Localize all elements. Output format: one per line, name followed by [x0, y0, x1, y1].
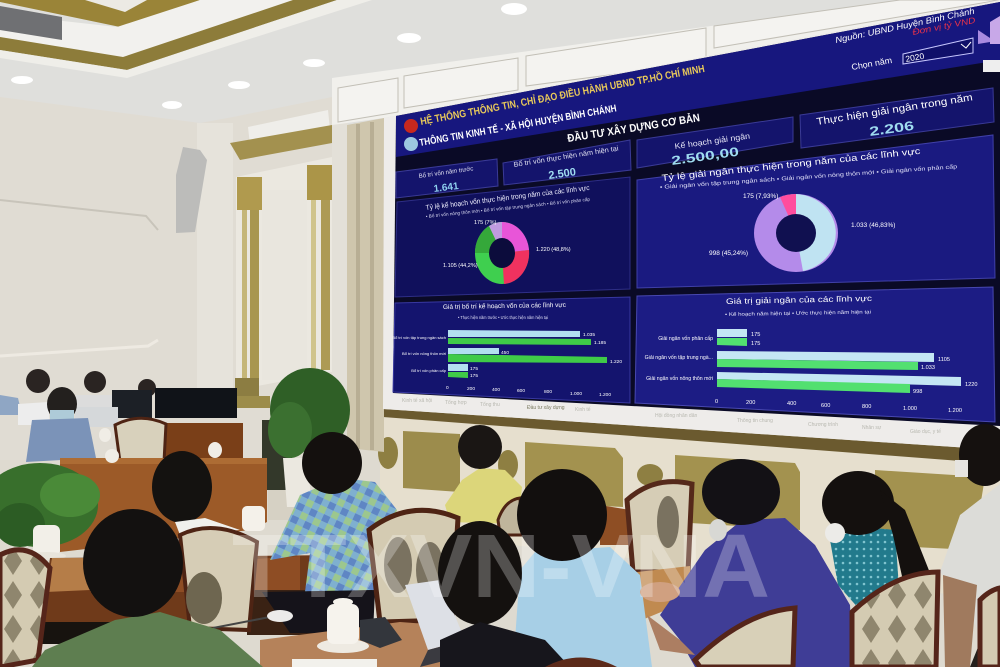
- LED dashboard screen: [383, 0, 1000, 450]
- donut labels: 175 (7,93%): [743, 193, 778, 200]
- donut legend: • Giải ngân vốn tập trung ngân sách • Giải ngân vốn nông thôn mới • Giải ngân vốn phân cấp: [660, 164, 957, 191]
- donut labels: 1.105 (44,2%): [443, 263, 478, 269]
- donut labels: 175 (7%): [474, 220, 496, 226]
- KPI card: disbursed this year: Thực hiện giải ngân trong năm: [816, 92, 974, 128]
- KPI card: disbursement plan: Kế hoạch giải ngân: [674, 131, 751, 151]
- screen dark background: [393, 2, 1000, 426]
- donut chart: allocation shares: [475, 222, 529, 284]
- bar values and axis: 600: [517, 388, 525, 394]
- bar values and axis: 998: [913, 389, 922, 395]
- screen white frame: [383, 0, 1000, 450]
- bar values and axis: 200: [746, 400, 755, 406]
- source note: Nguồn: UBND Huyện Bình Chánh: [834, 6, 976, 45]
- watermark: TTXVN-VNA: [232, 517, 770, 617]
- bar values and axis: 175: [751, 332, 760, 338]
- year dropdown: 2020: [905, 51, 925, 64]
- teacup and saucer: [317, 598, 369, 653]
- small chair behind blue shirt woman: [498, 498, 522, 535]
- KPI card: current-year allocation: Bổ trí vốn thực hiện năm hiện tại: [513, 143, 619, 169]
- bar values and axis: 175: [470, 373, 478, 379]
- man in green shirt, foreground: [32, 509, 263, 667]
- bar values and axis: 1.033: [921, 365, 935, 371]
- bar values and axis: 600: [821, 403, 830, 409]
- bar values and axis: 1105: [938, 357, 950, 363]
- panel: allocation bars: [392, 297, 630, 403]
- donut legend: • Bổ trí vốn nông thôn mới • Bổ trí vốn tập trung ngân sách • Bổ trí vốn phân cấp: [425, 196, 591, 219]
- bar values and axis: [446, 332, 622, 398]
- foreground chairs: [0, 550, 1000, 667]
- donut labels: [709, 193, 895, 257]
- horizontal bar chart: disbursement: [717, 329, 961, 393]
- donut labels: 998 (45,24%): [709, 250, 748, 257]
- bar values and axis: 400: [787, 401, 796, 407]
- header subtitle: THÔNG TIN KINH TẾ - XÃ HỘI HUYỆN BÌNH CHÁNH: [418, 101, 617, 149]
- bottom navigation tabs: Hội đồng nhân dân: [655, 413, 697, 419]
- woman in yellow shirt: [445, 425, 522, 524]
- bottom navigation tabs: Thông tin chung: [737, 418, 773, 424]
- bar values and axis: 1.000: [570, 391, 582, 397]
- header title: HỆ THỐNG THÔNG TIN, CHỈ ĐẠO ĐIỀU HÀNH UBND TP.HỒ CHÍ MINH: [419, 61, 706, 128]
- KPI card: disbursement plan: [637, 117, 793, 168]
- woman in light blue shirt: [515, 469, 652, 667]
- potted plant behind table: [262, 368, 350, 520]
- bar labels: Giải ngân vốn nông thôn mới: [646, 376, 713, 382]
- man in purple shirt: [640, 459, 853, 667]
- laptop: [405, 580, 467, 667]
- front table: [260, 622, 440, 667]
- back row staff: [0, 369, 156, 425]
- donut heading: Tỷ lệ kế hoạch vốn thực hiện trong năm của các lĩnh vực: [425, 183, 590, 212]
- paper on table: [292, 659, 377, 667]
- far wooden table: [600, 505, 630, 545]
- bar values and axis: [715, 332, 977, 414]
- donut labels: 1.033 (46,83%): [851, 222, 895, 229]
- bottom navigation tabs: Nhân sự: [862, 425, 882, 431]
- bar values and axis: 1.200: [948, 408, 962, 414]
- chart heading: Giá trị bố trí kế hoạch vốn của các lĩnh vực: [443, 300, 567, 311]
- chair beside floral shirt woman: [369, 510, 458, 622]
- KPI card: disbursed this year: 2.206: [868, 118, 915, 139]
- woman in teal shirt: [822, 471, 932, 610]
- bar labels: Giải ngân vốn tập trung ngà...: [645, 355, 713, 361]
- unit note: Đơn vị tỷ VND: [911, 15, 976, 37]
- wall speaker: [176, 147, 207, 233]
- columns and doorway: [230, 78, 348, 428]
- bar values and axis: 175: [470, 366, 478, 372]
- chair top at bottom edge: [545, 658, 617, 667]
- seated official in blue shirt: [26, 387, 96, 462]
- donut chart: disbursement shares: [754, 194, 838, 272]
- year dropdown: [903, 38, 973, 64]
- bar values and axis: 450: [501, 350, 509, 356]
- donut heading: Tỷ lệ giải ngân thực hiện trong năm của các lĩnh vực: [661, 146, 921, 183]
- bottom navigation tabs: Đầu tư xây dựng: [527, 405, 565, 411]
- curtain: [347, 118, 384, 452]
- header band: [396, 2, 1000, 157]
- donut labels: [443, 220, 571, 269]
- cup beside middle attendee: [242, 506, 265, 531]
- bar labels: Bổ trí vốn tập trung ngân sách: [392, 335, 446, 340]
- bar values and axis: 1.185: [594, 340, 606, 346]
- bar labels: Giải ngân vốn phân cấp: [658, 336, 713, 342]
- man in white checked shirt: [940, 424, 1000, 667]
- bar labels: Bổ trí vốn nông thôn mới: [402, 351, 446, 356]
- KPI card: disbursement plan: 2.500,00: [670, 145, 740, 168]
- bottom navigation tabs: Giáo dục, y tế: [910, 429, 941, 435]
- chart heading: Giá trị giải ngân của các lĩnh vực: [726, 294, 872, 306]
- KPI card: disbursed this year: [800, 88, 994, 148]
- bar values and axis: 0: [715, 399, 718, 405]
- main back table: [60, 458, 267, 552]
- bar values and axis: 1.000: [903, 406, 917, 412]
- brand mark: [978, 16, 1000, 72]
- chart legend: • Kế hoạch năm hiện tại • Ước thực hiện năm hiện tại: [725, 309, 871, 318]
- cup beside plant: [28, 525, 66, 560]
- bar labels: Bổ trí vốn phân cấp: [411, 368, 447, 373]
- bar values and axis: 175: [751, 341, 760, 347]
- back chair: [115, 418, 166, 462]
- KPI card: current-year allocation: [503, 140, 631, 185]
- bottom navigation tabs: Kinh tế: [575, 407, 591, 413]
- emblem logos: [404, 119, 418, 151]
- bar values and axis: 800: [544, 389, 552, 395]
- woman in floral blue shirt: [262, 432, 397, 633]
- chair back row right: [627, 482, 692, 572]
- front woman with laptop, dark top: [438, 521, 570, 667]
- bar values and axis: 0: [446, 385, 449, 391]
- bar values and axis: 800: [862, 404, 871, 410]
- bar values and axis: 400: [492, 387, 500, 393]
- upper cornice panels: [332, 0, 1000, 125]
- year label: Chọn năm: [851, 55, 893, 72]
- KPI card: previous-year allocation: Bổ trí vốn năm trước: [418, 165, 474, 180]
- bar values and axis: 1.220: [610, 359, 622, 365]
- back table with staff: [0, 369, 267, 552]
- lower wall with gold ornate panels: [378, 409, 1000, 600]
- KPI card: previous-year allocation: [396, 159, 498, 198]
- bar labels: [645, 336, 713, 382]
- middle attendee with white collar: [152, 451, 240, 535]
- horizontal bar chart: allocation: [448, 330, 607, 378]
- conference microphone: [213, 610, 402, 648]
- KPI card: previous-year allocation: 1.641: [433, 181, 460, 195]
- bar values and axis: 1220: [965, 382, 977, 388]
- KPI card: current-year allocation: 2.500: [548, 166, 577, 182]
- section heading: ĐẦU TƯ XÂY DỰNG CƠ BẢN: [566, 111, 701, 145]
- panel: disbursement donut: [637, 135, 995, 288]
- bar values and axis: 1.200: [599, 392, 611, 398]
- left wall: [0, 97, 332, 460]
- chart legend: • Thực hiện năm trước • Ước thực hiện năm hiện tại: [458, 315, 548, 320]
- front left table: [40, 555, 372, 644]
- bottom navigation tabs: [402, 398, 941, 435]
- bottom navigation tabs: Tổng thu: [480, 401, 500, 408]
- ceiling: [0, 0, 1000, 130]
- donut labels: 1.220 (48,8%): [536, 247, 571, 253]
- chair behind middle attendee: [180, 528, 257, 630]
- table edge near purple shirt: [610, 566, 690, 625]
- panel: disbursement bars: [635, 287, 995, 422]
- bottom navigation tabs: Tổng hợp: [445, 399, 467, 406]
- plant on left table: [0, 463, 100, 547]
- bottom navigation tabs: Kinh tế xã hội: [402, 398, 432, 404]
- panel: allocation donut: [395, 177, 630, 297]
- bar labels: [392, 335, 447, 373]
- bottom navigation tabs: Chương trình: [808, 422, 838, 428]
- ceiling lights: [11, 3, 527, 109]
- bar values and axis: 200: [467, 386, 475, 392]
- bar values and axis: 1.035: [583, 332, 595, 338]
